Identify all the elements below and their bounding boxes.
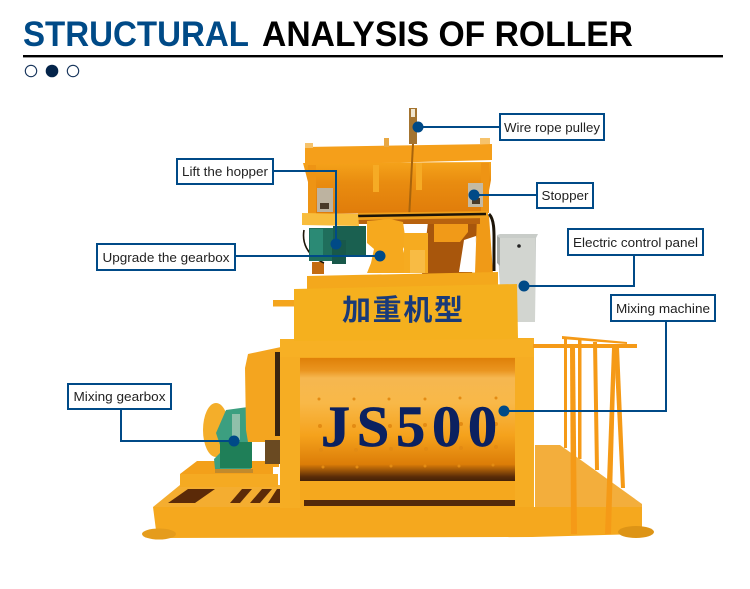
- wire rope pulley mast: [384, 108, 417, 219]
- callout: lift the hopper: [177, 159, 342, 250]
- housing Chinese label: 加重机型: [342, 294, 463, 327]
- callout: mixing machine: [498, 295, 715, 416]
- callout: upgrade the gearbox: [97, 244, 386, 270]
- callout: lift the hopper: Lift the hopper: [182, 164, 269, 179]
- callout: wire rope pulley: Wire rope pulley: [504, 120, 600, 135]
- stopper switches: [317, 183, 483, 212]
- lower hopper rail and cable: [358, 211, 488, 220]
- callout: stopper: Stopper: [542, 188, 589, 203]
- title: ANALYSIS OF ROLLER: [262, 15, 633, 54]
- title: [23, 15, 633, 54]
- mixing pulley: [203, 403, 229, 457]
- rear platform: [535, 445, 642, 507]
- motor shelf: [302, 213, 359, 226]
- upper housing: [273, 272, 518, 341]
- mixer frame: [280, 341, 534, 508]
- upgrade gearbox: [367, 219, 428, 273]
- electric control box: [497, 234, 538, 322]
- callout: electric control panel: [518, 229, 703, 292]
- gearbox platform: [180, 461, 279, 487]
- undercarriage below hopper: [312, 216, 493, 274]
- callout: wire rope pulley: [412, 114, 604, 140]
- base feet: [142, 528, 176, 540]
- title rule: [23, 55, 723, 57]
- belt cover: [245, 347, 281, 442]
- callout: stopper: [468, 183, 593, 208]
- machine illustration: [142, 108, 654, 540]
- callout: electric control panel: Electric control panel: [573, 235, 698, 250]
- hopper: [303, 162, 491, 214]
- railing back: [562, 336, 627, 488]
- callout: mixing gearbox: [68, 384, 240, 446]
- callout: upgrade the gearbox: Upgrade the gearbox: [102, 250, 230, 265]
- title: STRUCTURAL: [23, 15, 249, 54]
- drum model text: JS500: [321, 394, 497, 459]
- railing front: [533, 344, 637, 534]
- callout: mixing gearbox: Mixing gearbox: [74, 389, 166, 404]
- motor: [304, 226, 366, 264]
- drum bolts: [318, 396, 498, 468]
- mixing gearbox: [214, 407, 253, 473]
- pagination dots: [25, 65, 79, 77]
- callout: mixing machine: Mixing machine: [616, 301, 710, 316]
- base frame: [153, 507, 642, 538]
